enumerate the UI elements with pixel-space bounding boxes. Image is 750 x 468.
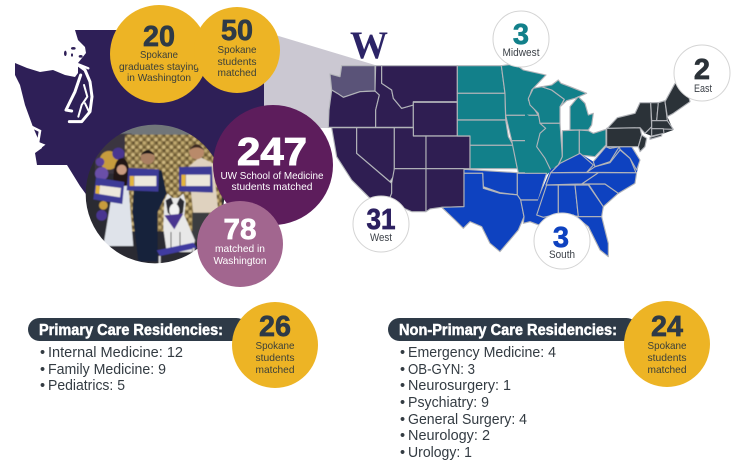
list: primary care specialties: Family Medicine: 9: [48, 362, 166, 378]
callout: West 31: [353, 196, 409, 252]
callout: South 3: [534, 213, 590, 269]
heading pill: primary care: [28, 318, 248, 341]
stat: 26 Spokane students matched: Spokane: [256, 340, 295, 352]
list: primary care specialties: [40, 345, 183, 394]
stat: 24 Spokane students matched: [624, 301, 710, 387]
list: non-primary care specialties: Neurology: 2: [408, 428, 490, 444]
list: non-primary care specialties: •: [400, 362, 405, 378]
stat: 247 UW School of Medicine students matched: [213, 105, 333, 225]
map: United States regions: [328, 64, 690, 257]
stat: 26 Spokane students matched: students: [256, 352, 294, 364]
list: non-primary care specialties: Emergency Medicine: 4: [408, 345, 556, 361]
stat: 78 matched in Washington: matched in: [215, 243, 265, 255]
stat: 20 Spokane graduates staying in Washington: [110, 5, 208, 103]
callout: Midwest 3: Midwest: [502, 47, 540, 59]
list: non-primary care specialties: Neurosurgery: 1: [408, 378, 511, 394]
callout: East 2: [674, 45, 730, 101]
callout: Midwest 3: 3: [513, 19, 529, 51]
stat: 78 matched in Washington: 78: [224, 214, 256, 246]
list: non-primary care specialties: OB-GYN: 3: [408, 362, 475, 378]
stat: 26 Spokane students matched: [232, 302, 318, 388]
sign centre: [127, 168, 159, 192]
stat: 26 Spokane students matched: 26: [259, 311, 291, 343]
stat: 24 Spokane students matched: 24: [651, 311, 683, 343]
region: South: [442, 147, 640, 257]
stool: [157, 243, 197, 256]
stat: 50 Spokane students matched: Spokane: [218, 44, 257, 56]
region: East: [607, 82, 690, 152]
list: primary care specialties: Internal Medicine: 12: [48, 345, 183, 361]
stat: 20 Spokane graduates staying in Washington: 20: [143, 21, 175, 53]
region: West: [328, 66, 470, 212]
small white notch on the southwest coast: [32, 127, 43, 152]
stat: 50 Spokane students matched: matched: [218, 67, 257, 79]
heading pill: primary care: Primary Care Residencies:: [39, 322, 223, 339]
sign left: [93, 178, 124, 204]
connector wedge from Washington to the map: [262, 31, 375, 128]
list: non-primary care specialties: General Surgery: 4: [408, 412, 527, 428]
stat: 20 Spokane graduates staying in Washington: graduates staying: [119, 61, 199, 73]
left graduate: [103, 185, 133, 246]
sign right: [179, 166, 213, 193]
callout: Midwest 3: [493, 11, 549, 67]
stat: 78 matched in Washington: Washington: [214, 255, 267, 267]
heading pill: non-primary care: Non-Primary Care Residencies:: [399, 322, 617, 339]
stat: 247 UW School of Medicine students matched: students matched: [232, 181, 313, 193]
callout: West 31: West: [370, 232, 392, 244]
list: non-primary care specialties: •: [400, 395, 405, 411]
list: non-primary care specialties: Urology: 1: [408, 445, 472, 461]
centre graduate: [132, 170, 167, 261]
right graduate: [188, 157, 218, 214]
stat: 50 Spokane students matched: students: [218, 56, 256, 68]
icon: San Juan islands: [64, 47, 83, 58]
icon: Puget Sound water: [66, 64, 92, 122]
stat: 247 UW School of Medicine students matched: 247: [237, 131, 307, 174]
list: non-primary care specialties: •: [400, 445, 405, 461]
callout: West 31: 31: [366, 204, 396, 236]
stat: 247 UW School of Medicine students matched: UW School of Medicine: [220, 170, 324, 182]
list: non-primary care specialties: •: [400, 378, 405, 394]
list: primary care specialties: •: [40, 362, 45, 378]
stat: 50 Spokane students matched: 50: [221, 15, 253, 47]
panel: primary care residencies: [28, 302, 318, 394]
list: non-primary care specialties: [400, 345, 556, 461]
callout: East 2: East: [694, 83, 712, 95]
list: non-primary care specialties: •: [400, 345, 405, 361]
stat: 50 Spokane students matched: [194, 7, 280, 93]
husky: [163, 194, 195, 252]
region: Midwest: [457, 64, 606, 177]
icon: UW W logo: W: [350, 24, 388, 67]
photo: students with husky mascot: [85, 122, 228, 265]
callout: East 2: 2: [694, 54, 710, 86]
list: primary care specialties: •: [40, 378, 45, 394]
stat: 24 Spokane students matched: students: [648, 352, 686, 364]
stat: 20 Spokane graduates staying in Washington: Spokane: [140, 49, 178, 61]
map: Washington state: [15, 30, 264, 197]
list: non-primary care specialties: •: [400, 428, 405, 444]
callout: South 3: 3: [553, 222, 569, 254]
stat: 78 matched in Washington: [197, 201, 283, 287]
callout: South 3: South: [549, 249, 575, 261]
stat: 24 Spokane students matched: Spokane: [648, 340, 687, 352]
list: non-primary care specialties: •: [400, 412, 405, 428]
list: primary care specialties: Pediatrics: 5: [48, 378, 125, 394]
panel: non-primary care residencies: [388, 301, 710, 461]
stat: 26 Spokane students matched: matched: [256, 364, 295, 376]
list: non-primary care specialties: Psychiatry: 9: [408, 395, 489, 411]
stat: 20 Spokane graduates staying in Washington: in Washington: [127, 72, 191, 84]
list: primary care specialties: •: [40, 345, 45, 361]
stat: 24 Spokane students matched: matched: [648, 364, 687, 376]
balloons: [100, 151, 118, 170]
